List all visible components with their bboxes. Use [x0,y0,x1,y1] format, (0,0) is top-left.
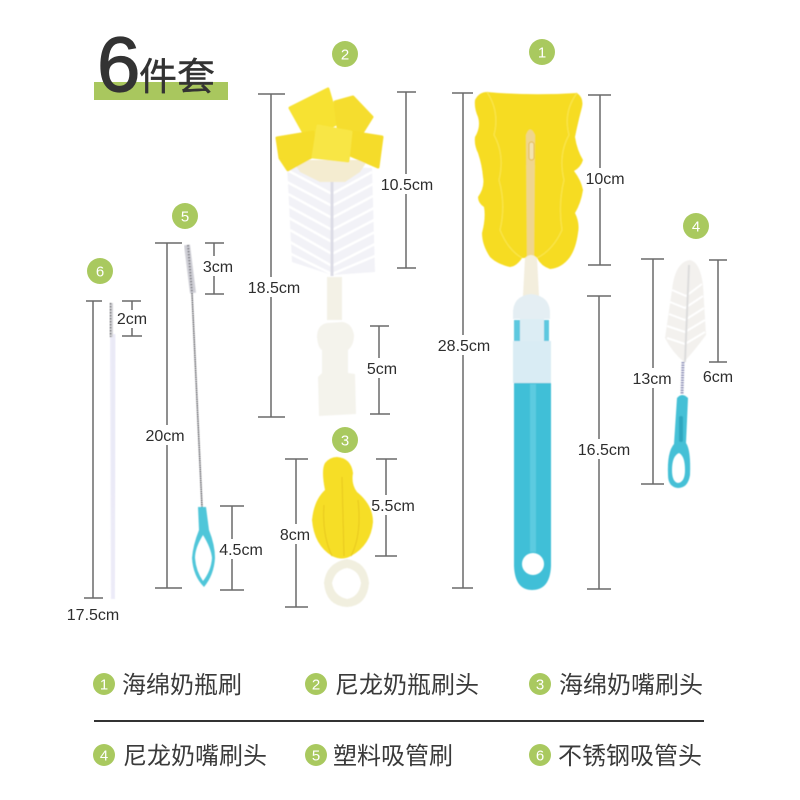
dimension: 5.5cm [371,459,415,556]
product 6: stainless straw head [110,303,115,598]
badge 4 [683,213,709,239]
dimension: 18.5cm: 18.5cm [248,280,300,297]
dimension: 6cm [703,260,733,386]
dimension: 20cm: 20cm [145,428,185,445]
legend item 6: 不锈钢吸管头 [558,743,702,770]
dimension: 2cm [117,301,147,336]
dimension: 28.5cm [438,93,490,588]
badge 1 [529,39,555,65]
legend item 3: 海绵奶嘴刷头 [559,672,703,699]
product 4: nylon teat brush [665,260,706,488]
dimension: 5cm [367,326,397,414]
badge 2 [332,41,358,67]
legend item 5: 塑料吸管刷 [333,743,453,770]
dimension: 3cm: 3cm [203,259,233,276]
product 3: sponge teat brush [312,457,373,607]
dimension: 13cm [632,259,672,484]
product 2: nylon bottle brush head [277,89,382,416]
badge 6: 6 [96,264,104,280]
dimension: 10cm: 10cm [585,171,625,188]
dimension: 4.5cm: 4.5cm [219,542,263,559]
legend item 5: 5 [312,748,320,764]
dimension: 17.5cm [67,301,119,624]
title: 6件套: 6 [97,20,140,108]
legend item 3: 3 [536,676,544,694]
dimension: 5.5cm: 5.5cm [371,498,415,515]
legend item 4: 尼龙奶嘴刷头 [123,743,267,770]
product 5: plastic straw brush [187,245,215,587]
product 1: sponge bottle brush [475,92,583,590]
dimension: 16.5cm [578,296,630,589]
dimension: 2cm: 2cm [117,311,147,328]
badge 3: 3 [341,432,349,450]
dimension: 8cm [280,459,310,607]
badge 3 [332,427,358,453]
title: 6件套: 件套 [139,57,215,99]
dimension: 6cm: 6cm [703,369,733,386]
legend item 4: 4 [100,748,108,764]
dimension: 10.5cm: 10.5cm [381,177,433,194]
legend item 1: 海绵奶瓶刷 [122,672,242,699]
legend item 1: 1 [100,676,108,694]
dimension: 18.5cm [248,94,300,417]
dimension: 10cm [585,95,625,265]
title: 6件套 [94,20,228,108]
legend item 2: 2 [312,676,320,694]
badge 2: 2 [341,46,349,64]
dimension: 10.5cm [381,92,433,268]
legend item 6: 6 [536,748,544,764]
badge 4: 4 [692,218,700,236]
dimension: 17.5cm: 17.5cm [67,607,119,624]
dimension: 8cm: 8cm [280,527,310,544]
dimension: 13cm: 13cm [632,371,672,388]
badge 1: 1 [538,44,546,62]
dimension: 28.5cm: 28.5cm [438,338,490,355]
dimension: 5cm: 5cm [367,361,397,378]
dimension: 20cm [145,243,185,588]
legend item 2: 尼龙奶瓶刷头 [335,672,479,699]
badge 5 [172,203,198,229]
badge 5: 5 [181,208,189,226]
dimension: 16.5cm: 16.5cm [578,442,630,459]
dimension: 4.5cm [219,506,263,590]
legend divider [94,720,704,722]
dimension: 3cm [203,243,233,294]
badge 6 [87,258,113,284]
